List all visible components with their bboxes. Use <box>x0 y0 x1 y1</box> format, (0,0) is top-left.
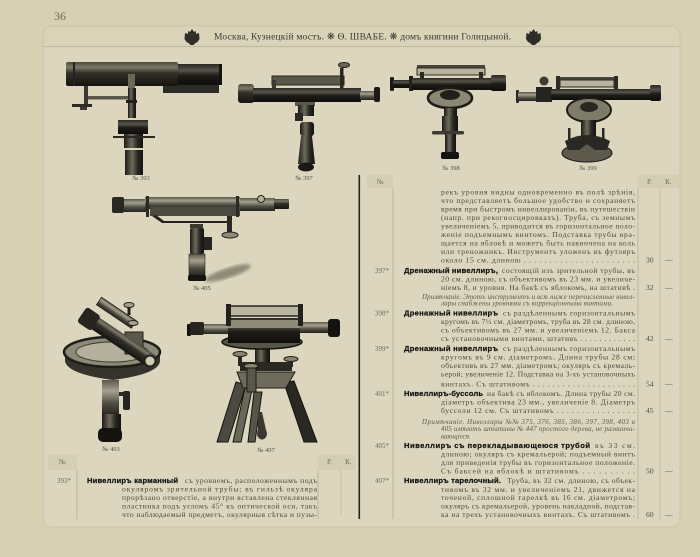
caption: No 398: № 398 <box>442 165 460 172</box>
entry 401: Примѣчаніе. Нивеллиры №№ 375, 376, 385, 386, 397, 398, 403 и <box>421 418 636 426</box>
entry 405: для приведенія трубы въ горизонтальное положеніе. <box>441 458 635 467</box>
entry 407: Труба, въ 32 см. длиною, съ объек- <box>507 476 635 485</box>
price row 54: — <box>664 380 673 388</box>
entry continuation text: увеличеніемъ 5, приводится въ горизонтальное поло- <box>441 222 635 230</box>
entry 405: Нивеллиръ съ перекладывающеюся трубой <box>404 441 590 450</box>
entry 399: съ раздѣленнымъ горизонтальнымъ <box>503 344 635 353</box>
entry: pocket level: Нивеллиръ карманный <box>87 476 178 485</box>
entry 401: діаметръ объектива 23 мм., увеличеніе 8. Діаметръ <box>441 398 635 406</box>
entry 398: съ объективомъ въ 27 мм. и увеличеніемъ 12. Бакса <box>441 326 636 334</box>
table: right column <box>367 175 680 519</box>
table header: right number column <box>367 175 393 188</box>
instrument: No 405 level <box>112 196 289 285</box>
price row 42: 42 <box>646 334 654 343</box>
entry 407 <box>375 476 636 519</box>
price row 32: — <box>664 283 673 292</box>
price row 45: — <box>664 406 673 415</box>
entry 398 <box>375 308 636 343</box>
entry 401: на бакѣ съ яблокомъ. Длина трубы 20 см. <box>487 389 635 398</box>
table header: left number column <box>48 455 77 470</box>
entry 397: 20 см. длиною, съ объективомъ въ 23 мм. и увеличе- <box>441 274 635 284</box>
entry: pocket level: съ уровнемъ, расположеннымъ подъ <box>185 476 317 485</box>
entry 401: вающіеся. <box>441 432 471 440</box>
entry: pocket level: пластинка подъ угломъ 45° къ оптической оси, такъ <box>122 502 317 510</box>
entry 401: буссоли 12 см. Съ штативомъ . . . . . . . . . . . . . . . . <box>441 406 635 415</box>
entry 401: 401* <box>375 390 390 398</box>
table header: left number column: № <box>59 458 66 466</box>
entry 401: Нивеллиръ-буссоль <box>404 389 483 398</box>
entry continuation text: щается на яблокѣ и можетъ быть навинчена на коль <box>441 238 636 248</box>
entry 399: Дренажный нивеллиръ <box>404 344 498 353</box>
caption: No 399: № 399 <box>579 165 597 172</box>
instrument: No 397 level <box>238 62 380 172</box>
entry 398: кругомъ въ 7½ см. діаметромъ, труба въ 28 см. длиною, <box>441 317 635 326</box>
entry 397: 397* <box>375 267 390 275</box>
caption: No 397: № 397 <box>295 175 314 182</box>
price row 42: — <box>664 334 673 343</box>
instrument: No 407 level on tripod <box>187 304 340 442</box>
table header: right number column: № <box>377 178 384 186</box>
entry 399: объективъ въ 27 мм. діаметромъ; окуляръ съ кремаль- <box>441 361 635 370</box>
entry 405: Съ баксей на яблокѣ и штативомъ . . . . . . . . . . <box>441 466 635 476</box>
catalogue number 393: 393* <box>57 477 72 485</box>
entry 397: лиры снабжены уровнями съ коррекціонными винтами. <box>440 300 613 308</box>
entry 399: кругомъ въ 9 см. діаметромъ. Длина трубы 28 см; <box>441 352 635 362</box>
entry 407: 407* <box>375 477 390 485</box>
instrument: No 398 level <box>390 65 506 159</box>
entry 407: Нивеллиръ тарелочный. <box>404 476 501 485</box>
table header: left price columns <box>318 455 355 470</box>
entry continuation text: время при быстромъ нивеллированіи, въ путешествіи <box>441 204 635 214</box>
price row 50: — <box>664 466 673 476</box>
entry 407: точеной, сплошной тарелкѣ въ 16 см. діаметромъ; <box>441 493 635 502</box>
entry 399: 399* <box>375 345 390 353</box>
entry 397: Примѣчаніе. Этотъ инструментъ и всѣ ниже перечисленные нивел- <box>421 293 636 301</box>
entry 405: въ 33 см. <box>595 441 635 450</box>
price row 60: — <box>664 510 673 519</box>
entry 399: винтахъ. Съ штативомъ . . . . . . . . . . . . . . . . . . . . . <box>441 380 635 388</box>
entry continuation text <box>440 188 636 264</box>
entry 401 <box>375 389 636 440</box>
table header: left price columns: Р. <box>327 458 332 466</box>
entry: pocket level: окуляромъ зрительной трубы; въ гильзѣ окуляра <box>122 484 318 494</box>
entry 405 <box>375 441 635 476</box>
instrument: No 403 compass level <box>64 297 160 442</box>
entry 405: 405* <box>375 442 390 450</box>
entry 405: длиною; окуляръ съ кремальерой; подъемный винтъ <box>441 450 635 458</box>
table header: right price columns <box>638 175 680 188</box>
entry 407: ка на трехъ установочныхъ винтахъ. Съ штативомъ . <box>441 510 635 519</box>
header band <box>43 26 680 46</box>
entry 397: Дренажный нивеллиръ, <box>404 266 498 275</box>
price row 32: 32 <box>646 283 654 292</box>
entry 397 <box>375 266 636 308</box>
caption: No 393: № 393 <box>132 175 150 182</box>
entry 407: окуляръ съ кремальерой, уровень накладной, подстав- <box>441 502 635 510</box>
header text: Москва, Кузнецкій мостъ. ❋ Ѳ. ШВАБЕ. ❋ домъ княгини Голицыной. <box>214 32 511 42</box>
entry 401: 405 имѣютъ штативы № 447 простого дерева, не развинчи- <box>441 425 636 433</box>
instrument: No 399 level <box>516 76 661 162</box>
table header: right price columns: Р. <box>647 178 652 186</box>
entry 398: съ установочными винтами, штативъ . . . . . . . . . . . . <box>441 334 635 343</box>
entry continuation text: около 15 см. длиною . . . . . . . . . . . . . . . . . . . . . . <box>441 256 635 264</box>
instrument: No 393 pocket level <box>66 62 222 175</box>
entry 397: состоящій изъ зрительной трубы, въ <box>502 266 635 275</box>
page number: 36 <box>54 9 66 23</box>
price row 60: 60 <box>646 510 654 519</box>
entry 399 <box>375 344 635 388</box>
icon: left eagle emblem <box>184 29 200 45</box>
entry: pocket level <box>87 476 318 519</box>
entry continuation text: женіе подъемнымъ винтомъ. Подставка трубы вра- <box>440 230 635 239</box>
entry 398: 398* <box>375 310 390 318</box>
entry 397: ніемъ 8, и уровня. На бакѣ съ яблокомъ, на штативѣ . <box>441 283 635 292</box>
price row 30: 30 <box>646 256 654 264</box>
caption: No 403: № 403 <box>102 446 120 453</box>
entry continuation text: что представляетъ большое удобство и сохраняетъ <box>441 196 635 205</box>
price row 50: 50 <box>646 466 654 476</box>
price row 54: 54 <box>646 380 654 388</box>
table header: left price columns: К. <box>345 458 352 466</box>
vertical divider <box>358 175 360 519</box>
table: left column <box>48 455 355 519</box>
entry continuation text: рекъ уровня видны одновременно въ полѣ зрѣнія, <box>441 188 635 196</box>
price row 30: — <box>664 256 673 264</box>
caption: No 407: № 407 <box>257 447 276 454</box>
entry continuation text: (напр. при рекогносцировкахъ). Труба, съ земнымъ <box>441 213 635 222</box>
icon: right eagle emblem <box>526 29 541 45</box>
table header: right price columns: К. <box>665 178 672 186</box>
entry: pocket level: прорѣзано отверстіе, а внутри вставлена стеклянная <box>122 493 318 502</box>
entry continuation text: или треножникъ. Инструментъ уложенъ въ футляръ <box>441 247 635 256</box>
price row 45: 45 <box>646 406 654 415</box>
entry 398: Дренажный нивеллиръ <box>404 308 498 318</box>
caption: No 405: № 405 <box>193 285 211 292</box>
entry 399: ьерой; увеличеніе 12. Подставка на 3-хъ установочныхъ <box>441 370 635 378</box>
entry: pocket level: что наблюдаемый предметъ, окулярныя сѣтка и пузы- <box>122 510 317 519</box>
entry 407: тивомъ въ 32 мм. и увеличеніемъ 21, движется на <box>441 485 636 494</box>
entry 398: съ раздѣленнымъ горизонтальнымъ <box>503 308 635 318</box>
